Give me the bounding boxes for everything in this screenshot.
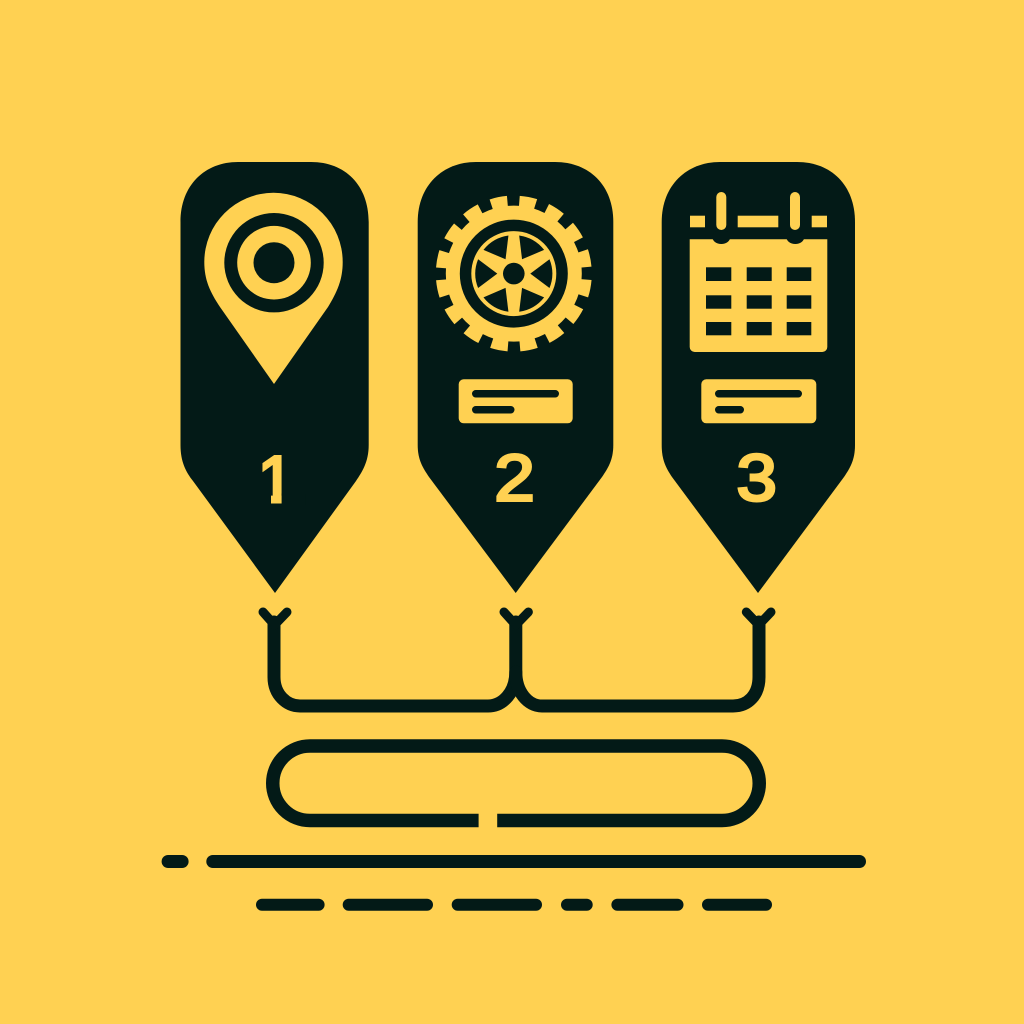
panel: step 1 location	[180, 162, 369, 593]
panel: step 2 tyre	[418, 162, 613, 593]
panel: step 3 calendar	[662, 162, 855, 593]
pin shape 2	[418, 162, 613, 593]
label card 3	[701, 379, 816, 423]
number 1	[246, 442, 306, 516]
icon: tyre and wheel	[441, 201, 586, 346]
icon: map marker	[204, 193, 343, 384]
label card 2	[459, 379, 573, 423]
divider line with short dash	[162, 855, 866, 868]
number 1: 1	[258, 442, 294, 516]
number 3: 3	[737, 441, 777, 515]
outlined pill bar	[273, 746, 759, 820]
icon: calendar	[690, 192, 827, 352]
dashed text placeholder row	[256, 899, 772, 911]
pin shape 3	[662, 162, 855, 593]
pin shape 1	[180, 162, 369, 593]
connector: branches joining the three pins	[263, 612, 771, 706]
number 2: 2	[494, 441, 535, 515]
